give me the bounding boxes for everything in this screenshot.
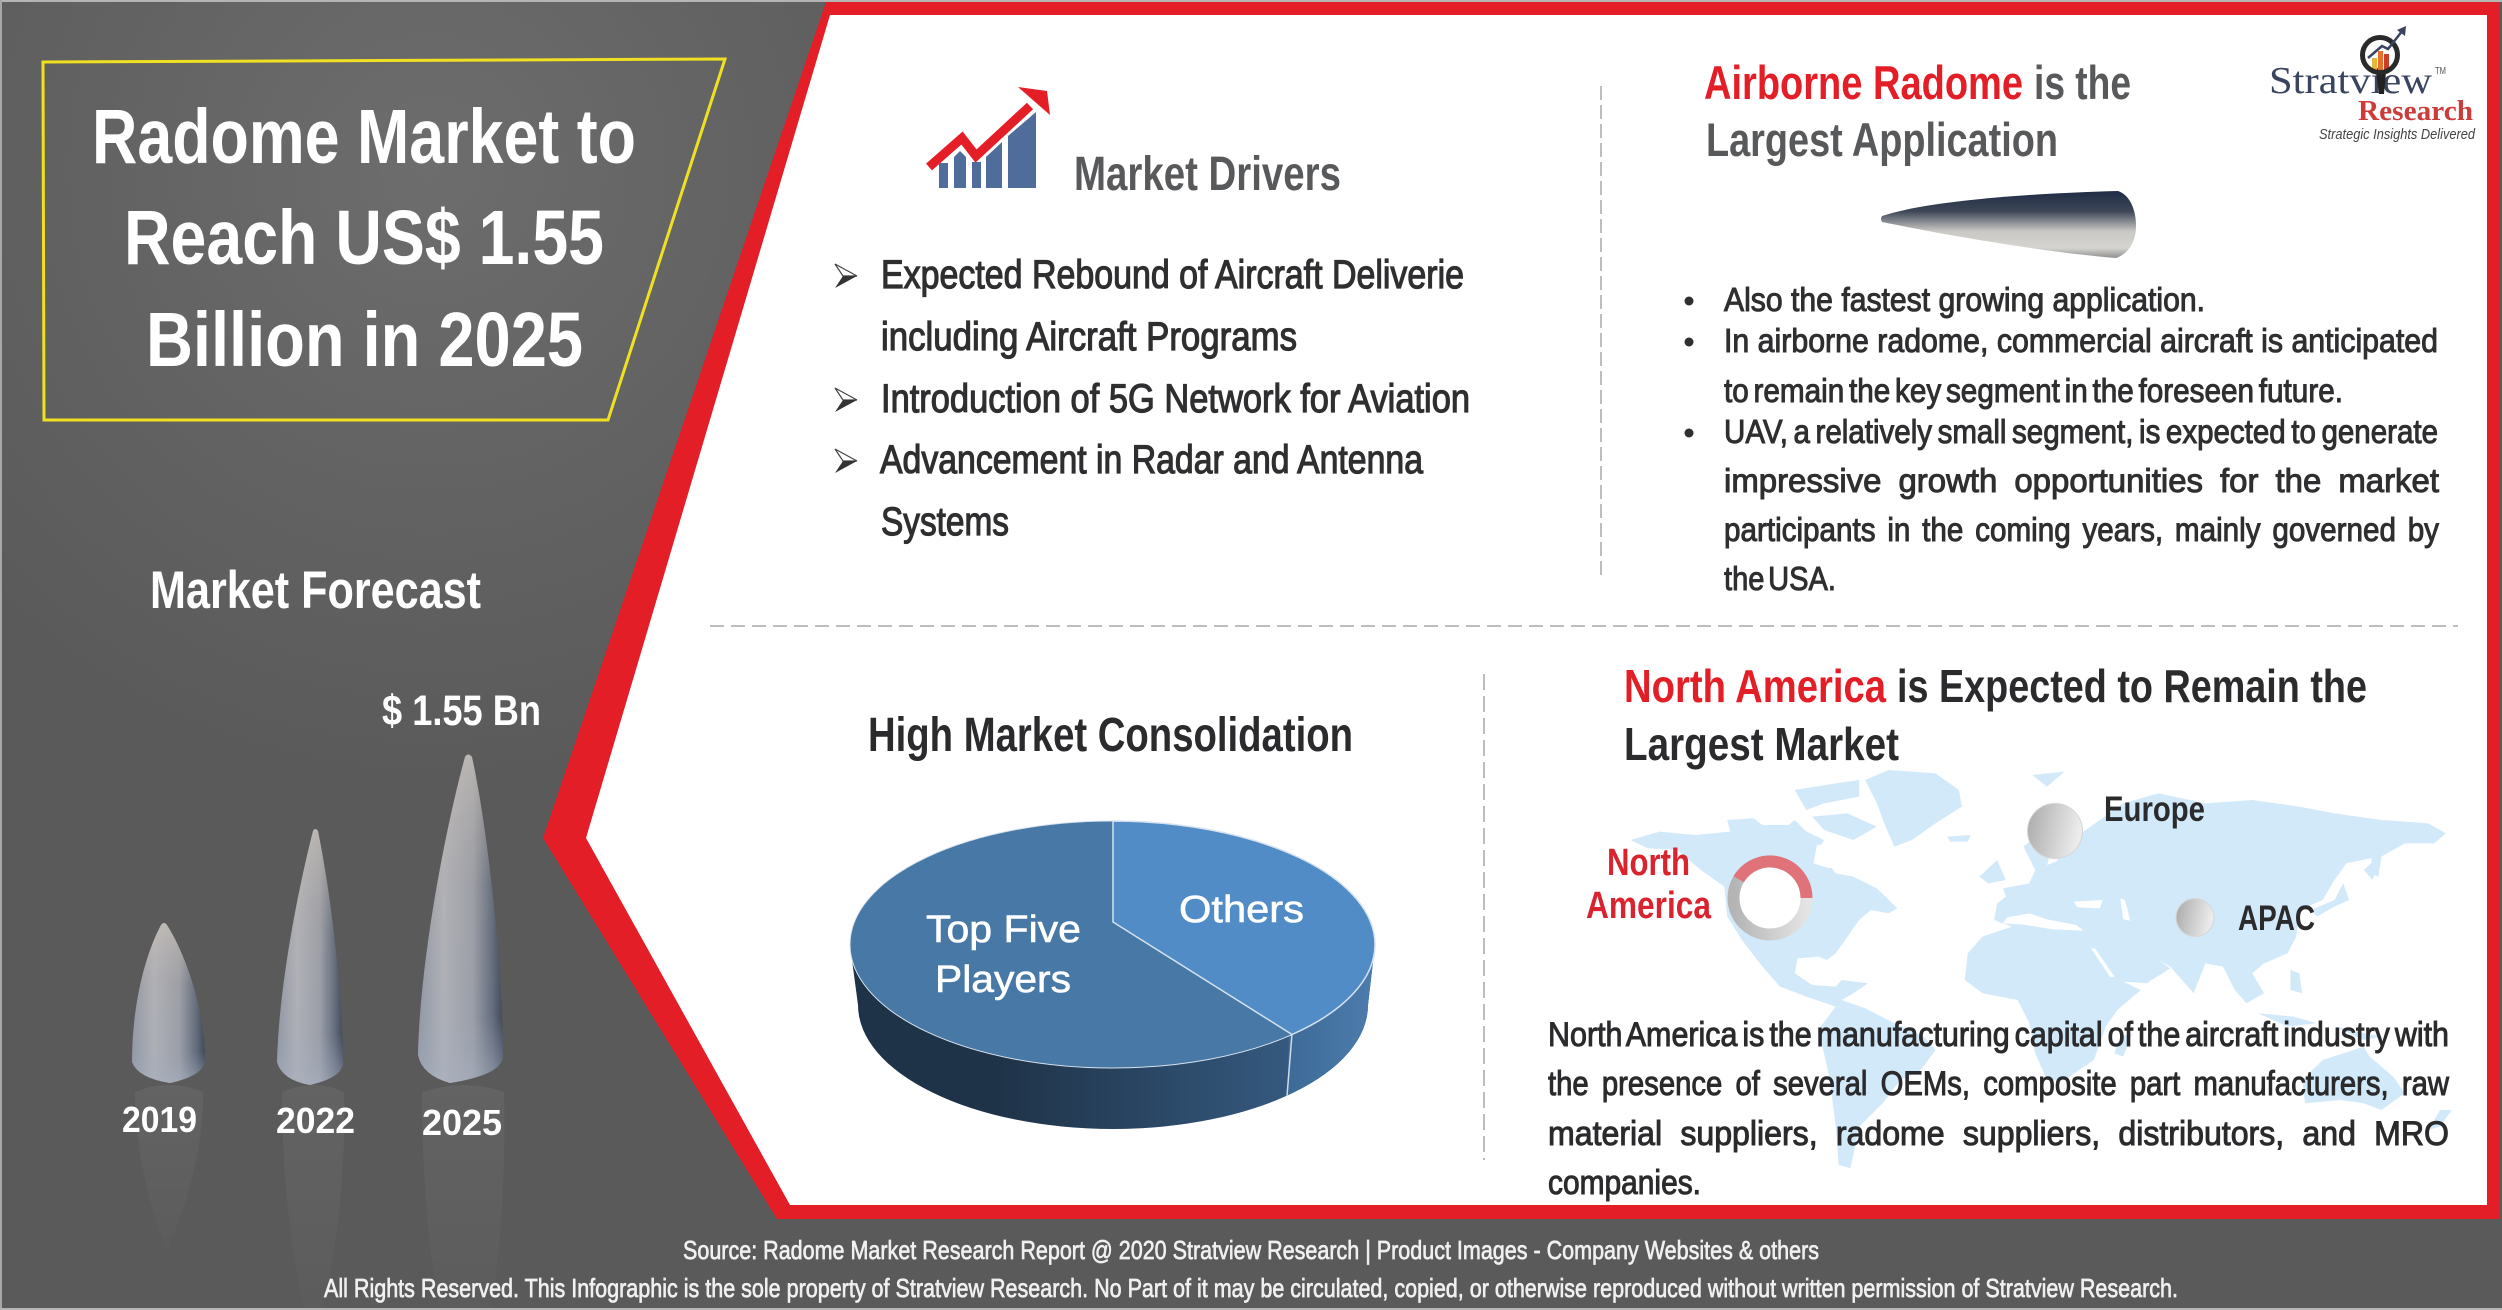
title text: Billion in 2025 xyxy=(146,297,583,383)
radome 2022 xyxy=(277,829,343,1085)
logo wordmark: Stratview xyxy=(2269,60,2433,102)
heading: is Expected to Remain the xyxy=(1897,660,2367,712)
panel: airborne radome xyxy=(1684,56,2440,598)
red framed content panel xyxy=(543,2,2500,1219)
marker: europe xyxy=(2028,804,2082,858)
footer source text: All Rights Reserved. This Infographic is the sole property of Stratview Research. No Part of it may be circulated, copied, or otherwise reproduced without written permission of Stratview Research. xyxy=(324,1273,2178,1303)
world map xyxy=(1630,770,2452,1168)
footer source text xyxy=(324,1235,2178,1303)
year labels: 2022 xyxy=(276,1100,355,1141)
panel: market consolidation xyxy=(850,709,1375,1129)
value label: 1.55 Bn: $ 1.55 Bn xyxy=(382,687,541,735)
heading: is the xyxy=(2034,56,2131,109)
panel: market drivers xyxy=(835,87,1470,544)
heading: Airborne Radome xyxy=(1704,56,2023,109)
marker: north america xyxy=(1734,861,1806,934)
driver list: Advancement in Radar and Antenna xyxy=(880,438,1424,482)
heading: North America xyxy=(1624,660,1886,712)
marker label: apac: APAC xyxy=(2238,899,2315,938)
application text: impressive growth opportunities for the market xyxy=(1724,463,2440,500)
application text: to remain the key segment in the foreseen future. xyxy=(1724,373,2343,410)
heading: High Market Consolidation xyxy=(868,709,1353,762)
marker label: north america: North xyxy=(1607,842,1690,884)
logo: Stratview Research xyxy=(2269,26,2476,143)
heading: market forecast: Market Forecast xyxy=(150,561,481,620)
pie labels: Players xyxy=(935,959,1071,1001)
logo research: Research xyxy=(2358,96,2473,127)
marker label: europe: Europe xyxy=(2104,790,2205,829)
year labels xyxy=(122,1099,502,1143)
driver list: including Aircraft Programs xyxy=(881,315,1297,359)
driver list xyxy=(880,253,1470,544)
icon: horizontal radome xyxy=(1881,191,2136,258)
title text: Radome Market to xyxy=(92,94,636,180)
application text: the USA. xyxy=(1724,561,1836,598)
paragraph xyxy=(1548,1016,2449,1202)
pie labels xyxy=(926,889,1304,1001)
heading: Largest Market xyxy=(1624,718,1899,770)
map seas xyxy=(1813,843,2130,977)
heading: Largest Application xyxy=(1706,113,2058,166)
marker label: north america: America xyxy=(1586,885,1712,927)
pie labels: Top Five xyxy=(926,909,1081,951)
driver list: Expected Rebound of Aircraft Deliverie xyxy=(881,253,1464,297)
bullet arrows xyxy=(835,264,857,473)
heading xyxy=(1704,56,2131,166)
heading xyxy=(1624,660,2367,770)
application text: In airborne radome, commercial aircraft is anticipated xyxy=(1724,323,2438,360)
title text xyxy=(92,94,636,383)
panel: north america xyxy=(1548,660,2452,1202)
title box xyxy=(43,59,725,420)
title text: Reach US$ 1.55 xyxy=(124,195,604,281)
year labels: 2025 xyxy=(422,1102,502,1143)
paragraph: companies. xyxy=(1548,1164,1701,1202)
bullet dots xyxy=(1684,296,1694,438)
trademark: TM xyxy=(2435,66,2446,77)
pie labels: Others xyxy=(1179,889,1304,931)
pie chart xyxy=(850,821,1375,1129)
application text: Also the fastest growing application. xyxy=(1724,282,2205,319)
application text xyxy=(1724,282,2440,598)
radome bar chart xyxy=(122,754,504,1310)
icon: magnifier with chart xyxy=(2362,26,2406,94)
heading: Market Drivers xyxy=(1074,148,1341,201)
logo tagline: Strategic Insights Delivered xyxy=(2319,127,2476,143)
year labels: 2019 xyxy=(122,1099,197,1140)
marker label: north america xyxy=(1586,842,1712,927)
radome 2019 xyxy=(132,923,205,1083)
marker: apac xyxy=(2176,898,2214,936)
radome 2025 xyxy=(418,754,503,1083)
radome reflections xyxy=(135,1085,504,1310)
paragraph: material suppliers, radome suppliers, distributors, and MRO xyxy=(1548,1115,2449,1153)
icon: rising bar chart with arrow xyxy=(929,87,1050,188)
driver list: Introduction of 5G Network for Aviation xyxy=(881,377,1470,421)
footer source text: Source: Radome Market Research Report @ 2020 Stratview Research | Product Images - Company Websites & others xyxy=(683,1235,1819,1265)
driver list: Systems xyxy=(881,500,1009,544)
